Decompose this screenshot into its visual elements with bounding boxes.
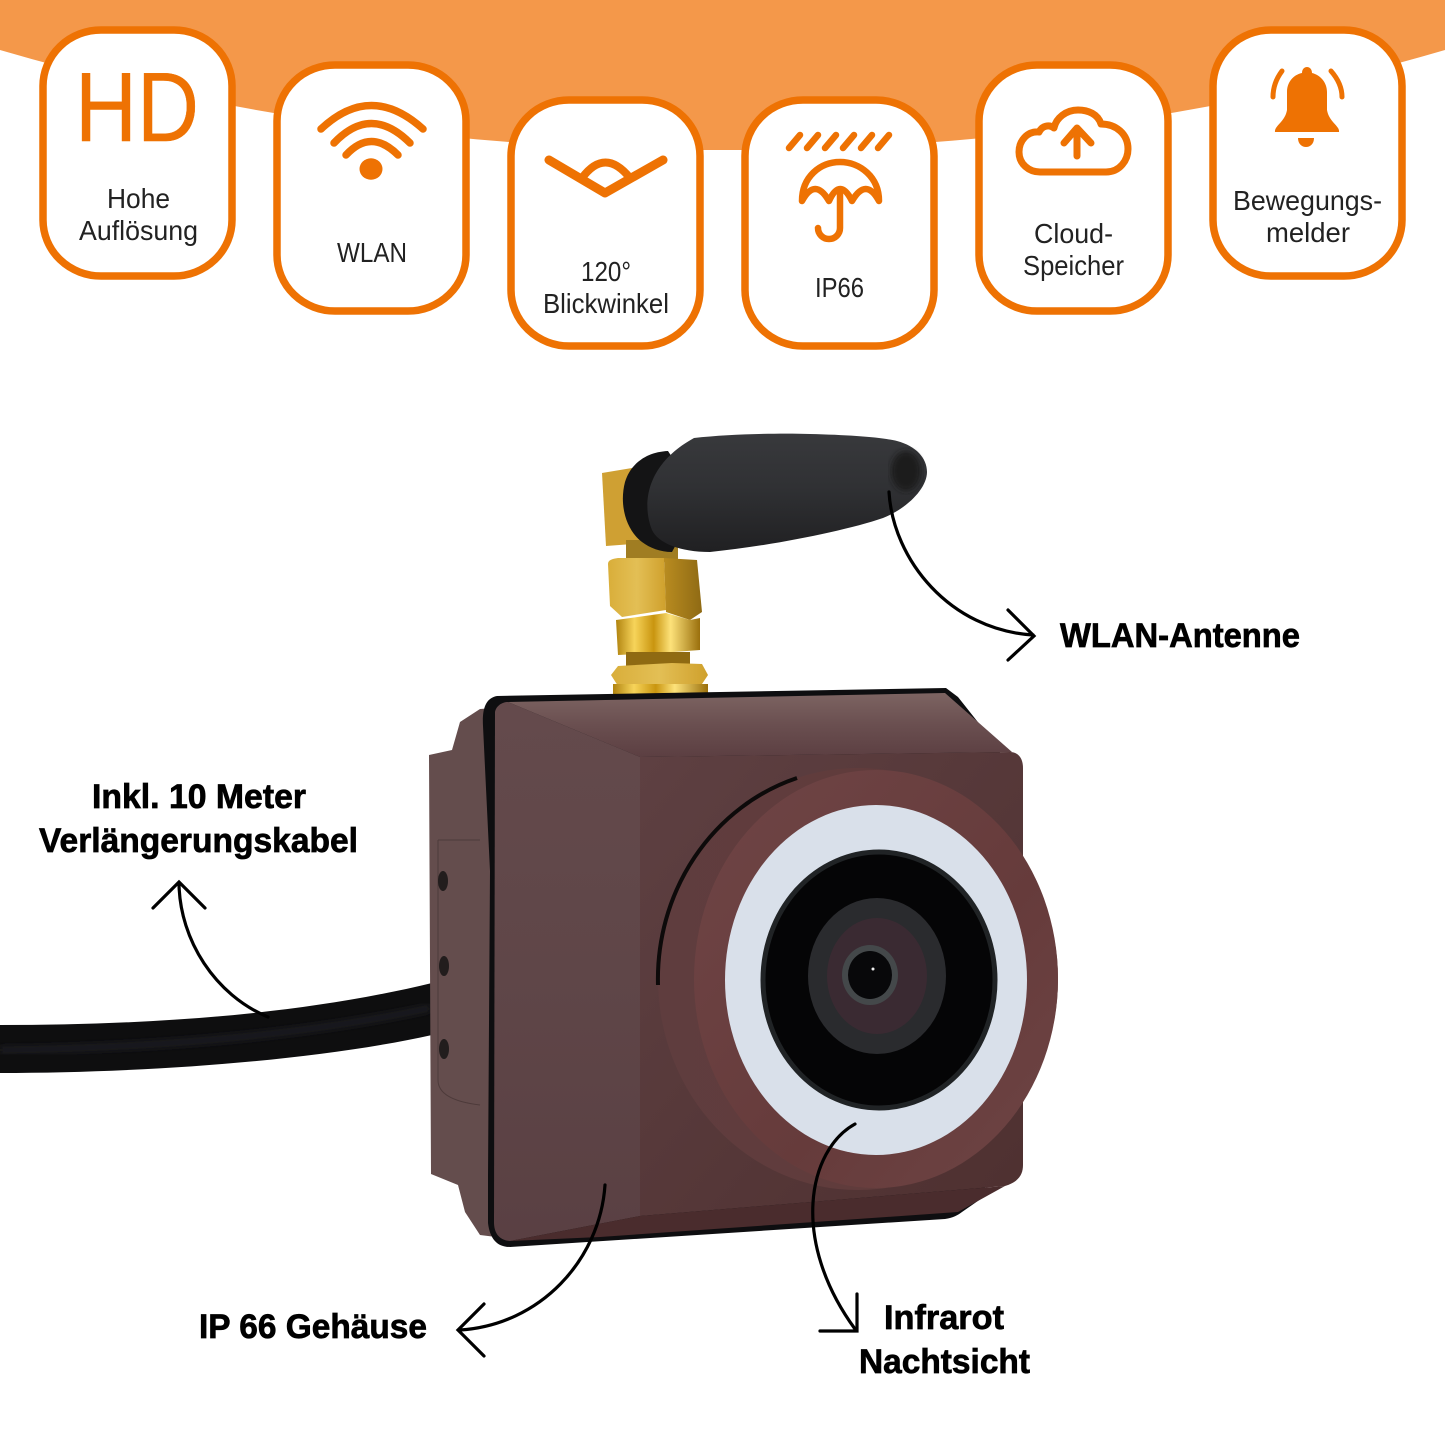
label: Inkl. 10 Meter Verlängerungskabel: Inkl. 10 Meter [92,778,306,816]
label: Inkl. 10 Meter Verlängerungskabel [39,778,358,860]
arrow: IP 66 Gehäuse [458,1185,605,1356]
icon: viewing angle [549,160,663,193]
icon: cloud upload [1019,110,1128,172]
label: 120° Blickwinkel: Blickwinkel [543,288,669,319]
camera lens [658,768,1058,1190]
label: Infrarot Nachtsicht [859,1299,1030,1381]
feature card: 120° Blickwinkel [511,100,700,346]
label: Hohe Auflösung: Auflösung [79,215,198,246]
feature card: Cloud-Speicher [979,65,1168,311]
antenna [623,434,927,552]
label: Bewegungsmelder: melder [1266,217,1350,248]
label: Cloud-Speicher: Cloud- [1034,218,1113,249]
cable [0,983,432,1073]
label: WLAN-Antenne: WLAN-Antenne [1060,617,1300,655]
feature card: IP66 [745,100,934,346]
label: IP66: IP66 [815,272,864,303]
icon: bell [1273,67,1342,147]
lens glass [808,898,946,1054]
label: Bewegungsmelder: Bewegungs- [1233,185,1382,216]
label: 120° Blickwinkel: 120° [581,256,631,287]
orange banner [0,0,1445,150]
icon: wifi [321,106,423,180]
label: Infrarot Nachtsicht: Nachtsicht [859,1343,1030,1381]
antenna connector [602,468,708,696]
arrow: Infrarot Nachtsicht [813,1124,857,1331]
feature card: Hohe Auflösung [43,30,232,276]
label: Cloud-Speicher: Speicher [1023,250,1124,281]
label: Inkl. 10 Meter Verlängerungskabel: Verlängerungskabel [39,822,358,860]
label: Hohe Auflösung: Hohe [107,183,170,214]
icon: rain and umbrella [789,135,889,239]
black lens barrel [761,850,997,1110]
label: 120° Blickwinkel [543,256,669,319]
label: Cloud-Speicher [1023,218,1124,281]
feature card: WLAN [277,65,466,311]
icon: HD: HD [75,52,199,162]
label: Infrarot Nachtsicht: Infrarot [884,1299,1004,1337]
white infrared ring [725,805,1027,1155]
label: IP 66 Gehäuse: IP 66 Gehäuse [199,1308,427,1346]
label: Bewegungsmelder [1233,185,1382,248]
camera housing [429,688,1023,1247]
label: Hohe Auflösung [79,183,198,246]
feature card: Bewegungsmelder [1213,30,1402,276]
arrow: Verlängerungskabel [153,882,268,1017]
arrow: WLAN-Antenne [889,492,1034,660]
label: WLAN: WLAN [337,237,407,268]
